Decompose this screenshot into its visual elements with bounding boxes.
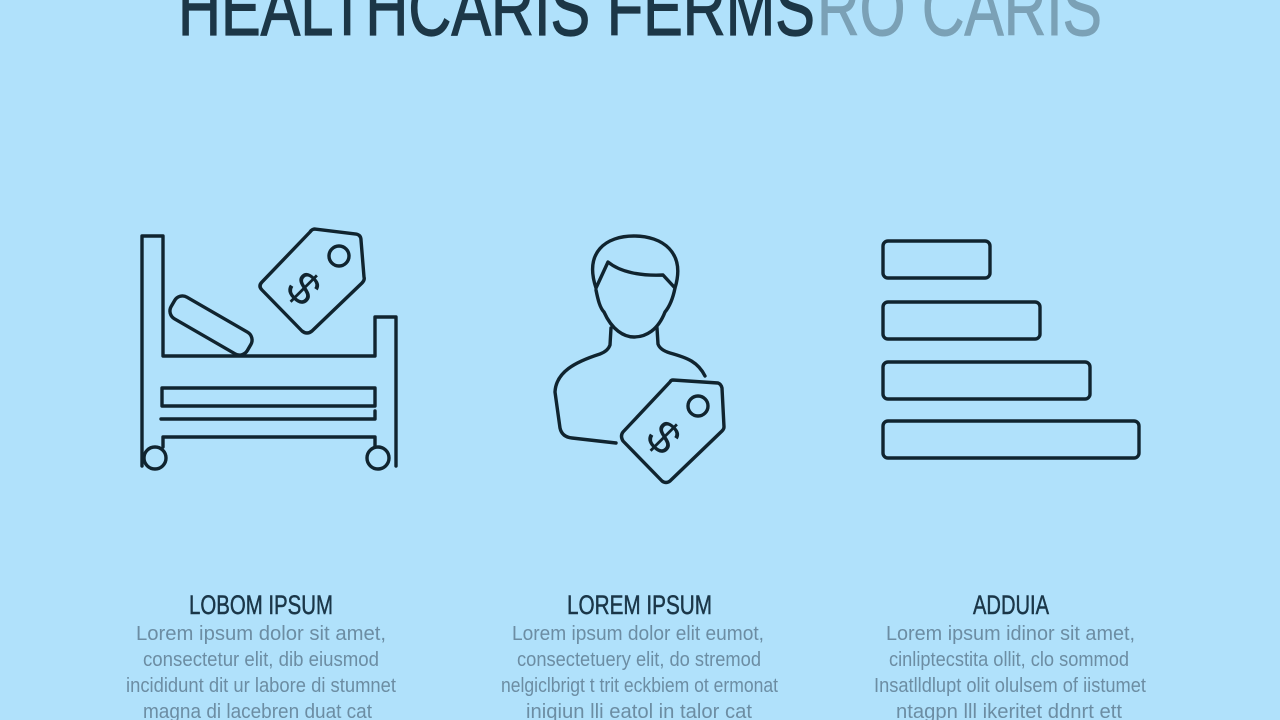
pillow — [167, 293, 255, 358]
price tag — [622, 380, 724, 482]
price tag — [260, 229, 364, 333]
bed frame — [142, 236, 396, 466]
body — [501, 623, 778, 720]
column 3 text — [874, 590, 1146, 720]
icon: person with price tag — [555, 236, 724, 482]
icon: descending bars — [883, 241, 1139, 458]
body: consectetuery elit, do stremod — [517, 649, 761, 671]
icon: hospital bed with price tag — [142, 229, 396, 469]
heading: LOREM IPSUM — [567, 590, 712, 620]
body: cinliptecstita ollit, clo sommod — [889, 649, 1129, 671]
person head and hair — [593, 236, 678, 337]
heading: LOBOM IPSUM — [189, 590, 333, 620]
person shoulders — [555, 328, 705, 443]
body: Lorem ipsum dolor elit eumot, — [512, 623, 764, 645]
body: nelgiclbrigt t trit eckbiem ot ermonat — [501, 675, 778, 697]
price tag: $ — [637, 410, 691, 464]
column 2 text — [501, 590, 778, 720]
heading: ADDUIA — [973, 590, 1049, 620]
column 1 text — [126, 590, 396, 720]
body: Insatlldlupt olit olulsem of iistumet — [874, 675, 1146, 697]
bed mattress slats — [161, 388, 375, 447]
price tag: $ — [277, 261, 331, 315]
body: incididunt dit ur labore di stumnet — [126, 675, 396, 697]
body: Lorem ipsum idinor sit amet, — [886, 623, 1135, 645]
body: Lorem ipsum dolor sit amet, — [136, 623, 386, 645]
body — [874, 623, 1146, 720]
body — [126, 623, 396, 720]
body: consectetur elit, dib eiusmod — [143, 649, 379, 671]
bed wheels — [144, 447, 389, 469]
